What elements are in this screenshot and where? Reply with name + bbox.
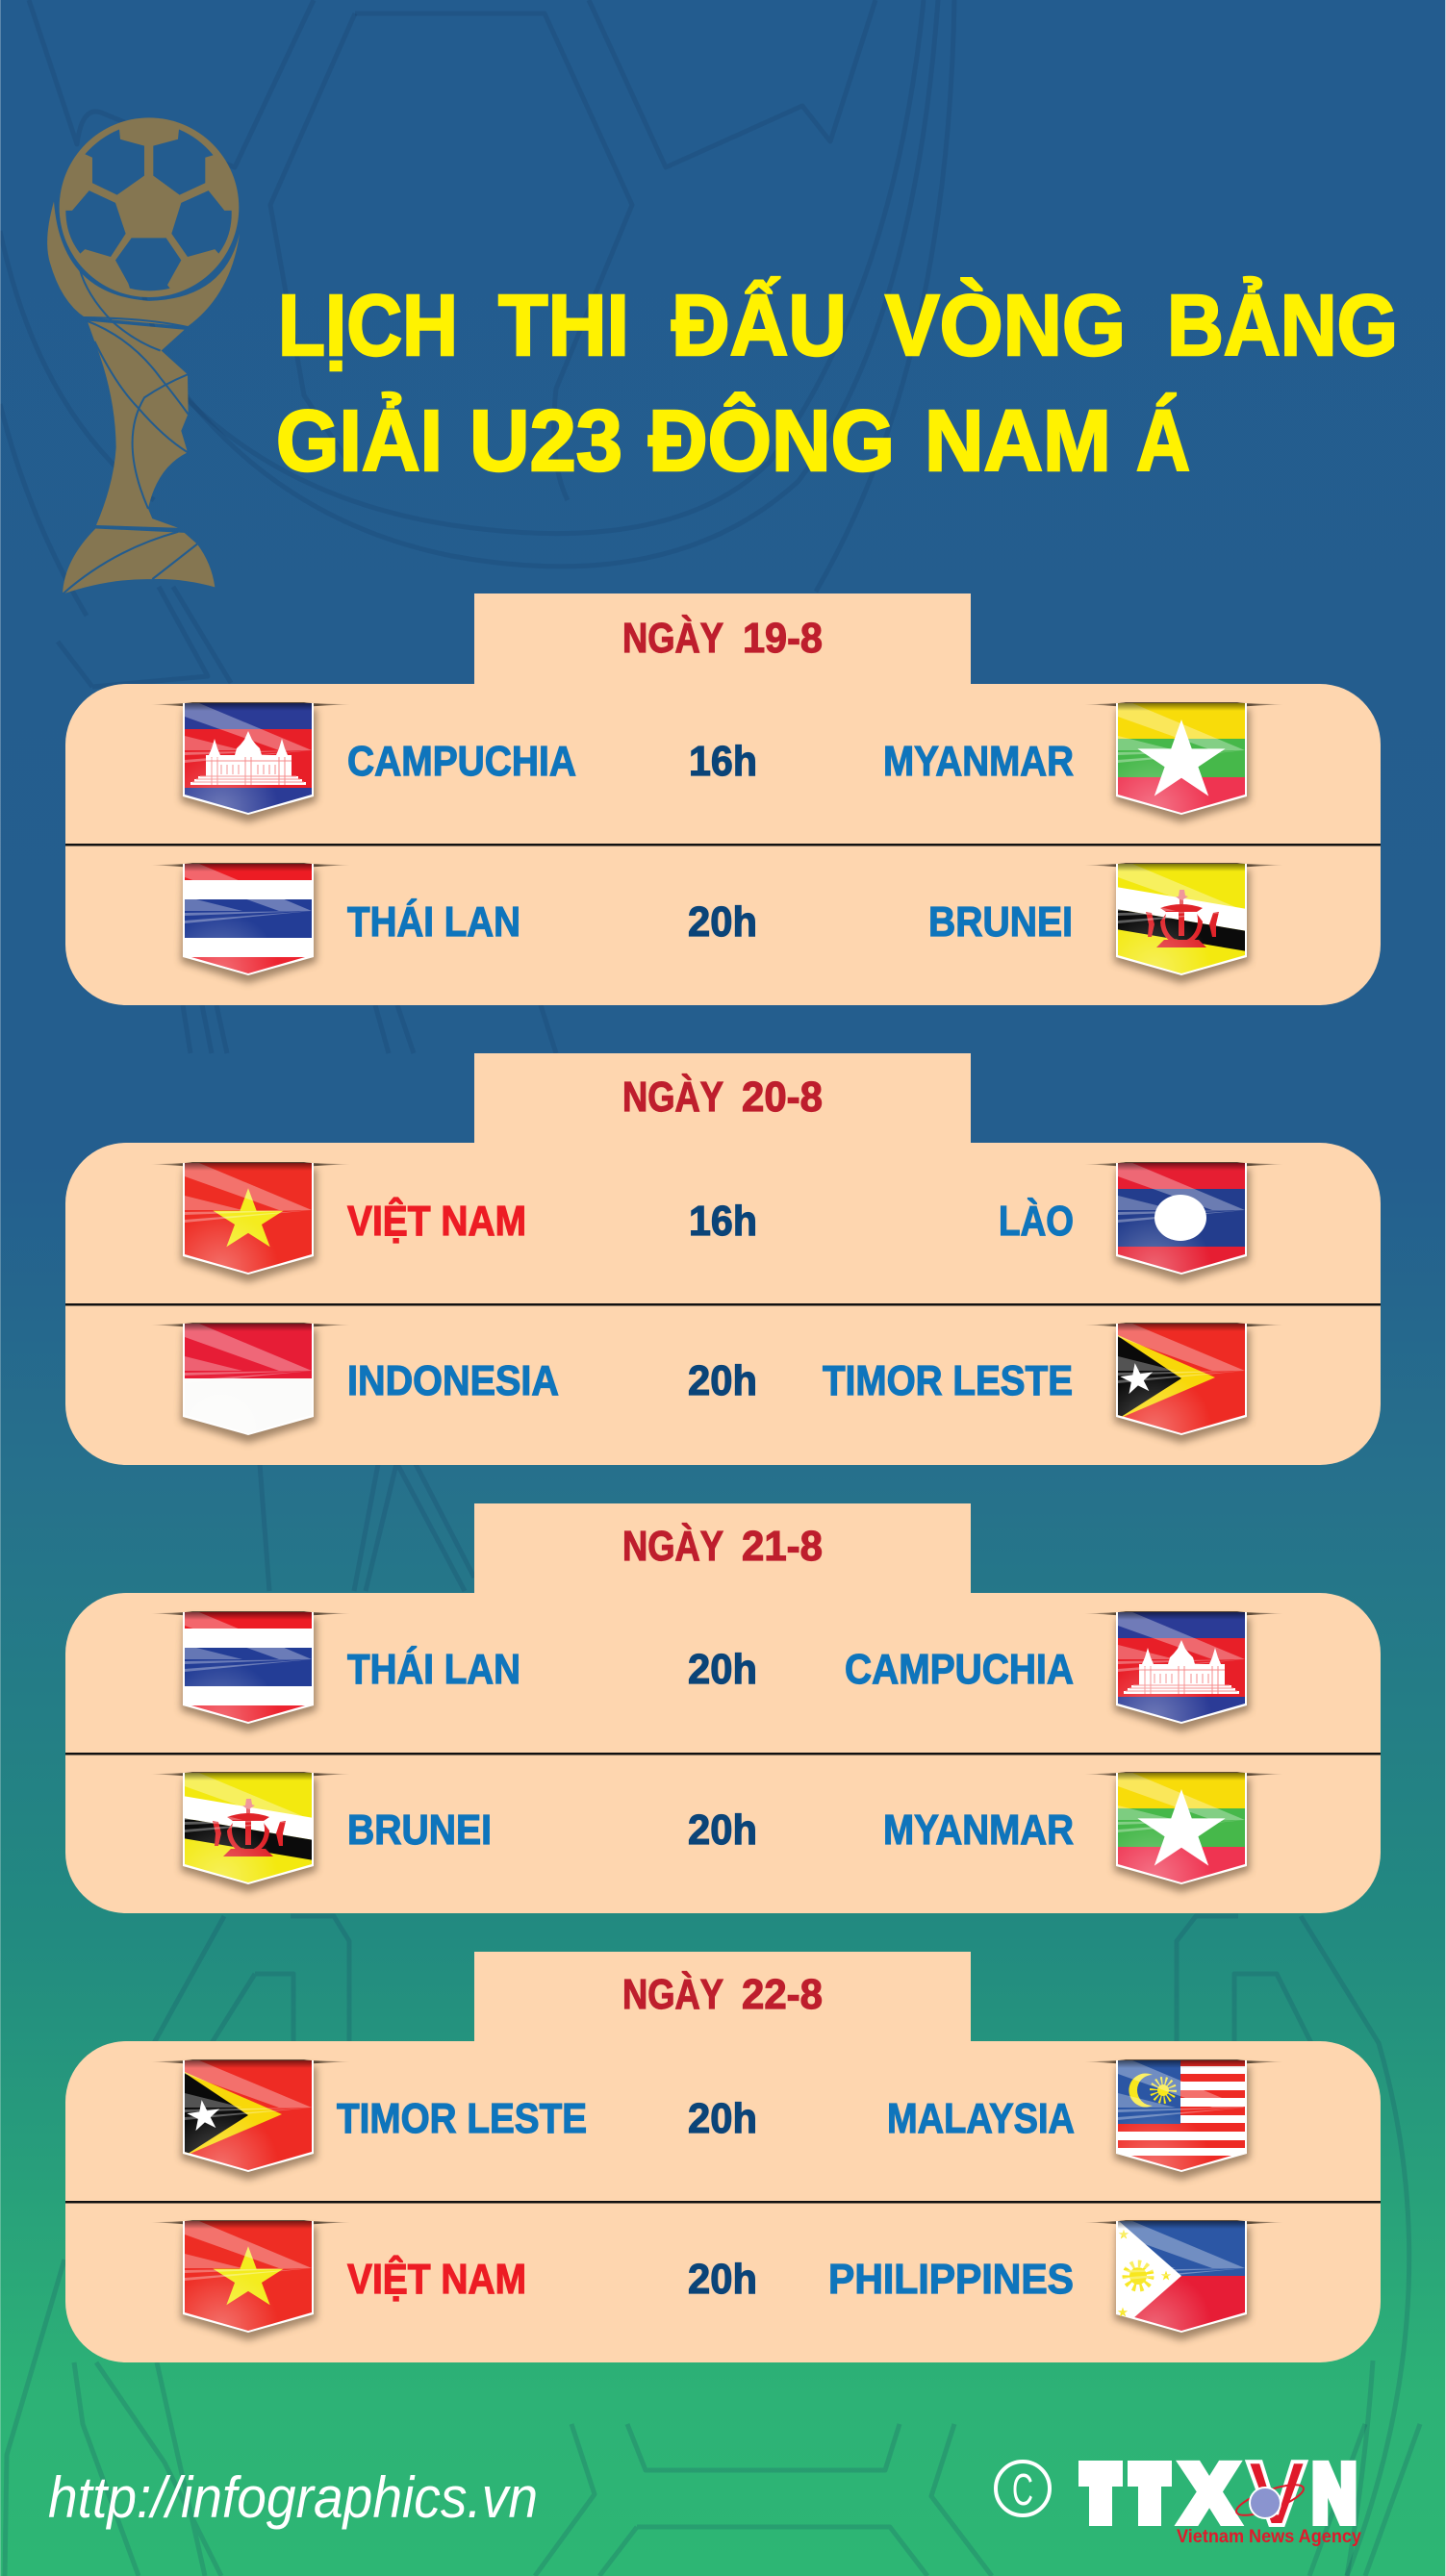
match card 21-8 [65,1593,1381,1913]
time 20h: 20h [688,2256,757,2303]
title: ĐẤU [672,276,847,374]
panel: day 19-8 [65,593,1381,1005]
flag: Lào [1084,1162,1283,1282]
flag: Brunei [1084,863,1283,983]
flag: Việt Nam [151,2220,350,2340]
team: Myanmar: MYANMAR [883,1806,1074,1854]
day tab 20-8: NGÀY [622,1073,723,1121]
flag: Thái Lan [151,863,350,983]
team: Campuchia: CAMPUCHIA [845,1646,1074,1693]
flag: Indonesia [151,1323,350,1443]
title: ĐÔNG [648,391,895,490]
flag: Việt Nam [151,1162,350,1282]
flag: Timor Leste [1084,1323,1283,1443]
flag: Campuchia [1084,1611,1283,1731]
title: GIẢI [276,391,443,490]
panel: day 22-8 [65,1952,1381,2362]
icon: gold trophy with football [47,117,240,594]
team: Brunei: BRUNEI [928,898,1073,946]
footer url: http://infographics.vn [48,2465,538,2530]
team: Thái Lan: THÁI LAN [347,1645,520,1693]
match card 22-8 [65,2041,1381,2362]
day tab 22-8: 22-8 [742,1971,823,2018]
title: U23 [469,393,622,490]
logo: TTXVN Vietnam News Agency: T [1135,2448,1164,2538]
flag: Philippines [1084,2220,1283,2340]
title: VÒNG [885,277,1126,374]
team: Indonesia: INDONESIA [347,1357,559,1404]
title: BẢNG [1167,276,1398,374]
team: Myanmar: MYANMAR [883,738,1074,785]
day tab 22-8: NGÀY [622,1970,723,2018]
day tab 20-8: 20-8 [742,1073,823,1121]
logo: TTXVN Vietnam News Agency [1078,2442,1361,2547]
flag: Malaysia [1084,2059,1283,2180]
team: Lào: LÀO [999,1197,1074,1245]
team: Thái Lan: THÁI LAN [347,897,520,946]
time 20h: 20h [688,898,757,946]
team: Malaysia: MALAYSIA [887,2095,1075,2142]
title [276,276,1398,490]
title: NAM [925,393,1111,490]
flag: Myanmar [1084,1772,1283,1892]
day tab 21-8: NGÀY [622,1522,723,1570]
team: Philippines: PHILIPPINES [828,2256,1074,2303]
day tab 19-8: 19-8 [743,615,823,662]
flag: Brunei [151,1772,350,1892]
team: Campuchia: CAMPUCHIA [347,738,576,785]
flag: Campuchia [151,702,350,822]
time 16h: 16h [689,1198,757,1245]
flag: Myanmar [1084,702,1283,822]
day tab 21-8: 21-8 [742,1523,823,1570]
time 20h: 20h [688,2095,757,2142]
day tab 22-8 [474,1952,971,2043]
time 16h: 16h [689,738,757,785]
day tab 19-8: NGÀY [622,614,723,662]
title: LỊCH [278,278,458,374]
title: Á [1136,392,1190,490]
match card 19-8 [65,684,1381,1005]
team: Brunei: BRUNEI [347,1806,492,1854]
logo: TTXVN Vietnam News Agency: T [1086,2448,1115,2538]
flag: Timor Leste [151,2059,350,2180]
team: Việt Nam: VIỆT NAM [347,2255,526,2303]
logo: TTXVN Vietnam News Agency: Vietnam News Agency [1177,2527,1361,2547]
day tab 21-8 [474,1503,971,1595]
panel: day 20-8 [65,1053,1381,1465]
logo: TTXVN Vietnam News Agency: V [1247,2442,1306,2545]
day tab 20-8 [474,1053,971,1145]
match card 20-8 [65,1143,1381,1465]
time 20h: 20h [688,1806,757,1854]
team: Timor Leste: TIMOR LESTE [337,2095,587,2142]
title: THI [498,278,629,374]
flag: Thái Lan [151,1611,350,1731]
panel: day 21-8 [65,1503,1381,1913]
team: Timor Leste: TIMOR LESTE [823,1357,1073,1404]
day tab 19-8 [474,593,971,685]
logo: TTXVN Vietnam News Agency: X [1182,2448,1236,2538]
time 20h: 20h [688,1646,757,1693]
copyright symbol: C [1012,2464,1033,2514]
time 20h: 20h [688,1357,757,1404]
copyright symbol [996,2462,1050,2515]
logo: TTXVN Vietnam News Agency: N [1312,2448,1357,2538]
team: Việt Nam: VIỆT NAM [347,1197,526,1245]
